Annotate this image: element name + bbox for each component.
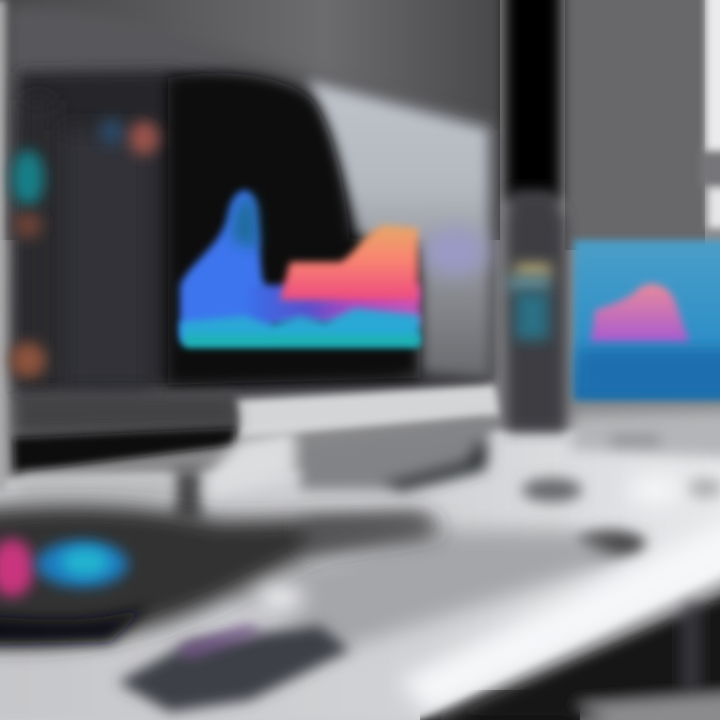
second monitor xyxy=(574,240,720,400)
glare panel xyxy=(308,80,492,380)
monitor bezel xyxy=(10,7,494,472)
phone purple reflection xyxy=(175,625,262,658)
sidebar accent rust xyxy=(14,211,42,239)
second monitor stand xyxy=(570,410,720,460)
black pillar xyxy=(505,0,561,200)
screen dark panel xyxy=(16,70,490,392)
monitor stand xyxy=(20,420,490,520)
desk objects: mice xyxy=(320,478,720,622)
shadow under desk xyxy=(430,570,720,720)
phone on desk xyxy=(118,625,350,712)
blue peak xyxy=(180,191,275,340)
dark desk mat xyxy=(0,505,445,645)
second screen xyxy=(574,240,720,400)
monitor chin xyxy=(235,385,500,438)
second screen lower band xyxy=(578,350,720,395)
sidebar accent red xyxy=(129,121,159,155)
sidebar accent orange xyxy=(10,342,46,378)
screen area chart xyxy=(180,191,420,347)
cyan base band xyxy=(180,308,420,345)
desk surface xyxy=(0,430,720,720)
tablet rainbow strip xyxy=(515,264,551,276)
purple mid band xyxy=(250,285,420,325)
bright window at right edge xyxy=(700,0,720,228)
sidebar accent teal xyxy=(12,150,44,206)
sidebar accent blue xyxy=(99,118,125,146)
purple glare by chart xyxy=(423,228,487,276)
tablet center device xyxy=(506,190,566,432)
left light edge xyxy=(0,0,6,490)
bright desk highlights xyxy=(256,476,720,715)
keyboard xyxy=(225,530,620,650)
mat glow: cyan xyxy=(36,541,128,587)
tablet teal strip xyxy=(515,292,549,340)
main monitor xyxy=(0,0,500,490)
orange pink ridge xyxy=(280,225,418,300)
mat glow: pink xyxy=(0,539,34,597)
second screen hill chart xyxy=(590,284,690,342)
black chart background xyxy=(168,73,420,385)
sidebar text rows xyxy=(24,100,152,390)
